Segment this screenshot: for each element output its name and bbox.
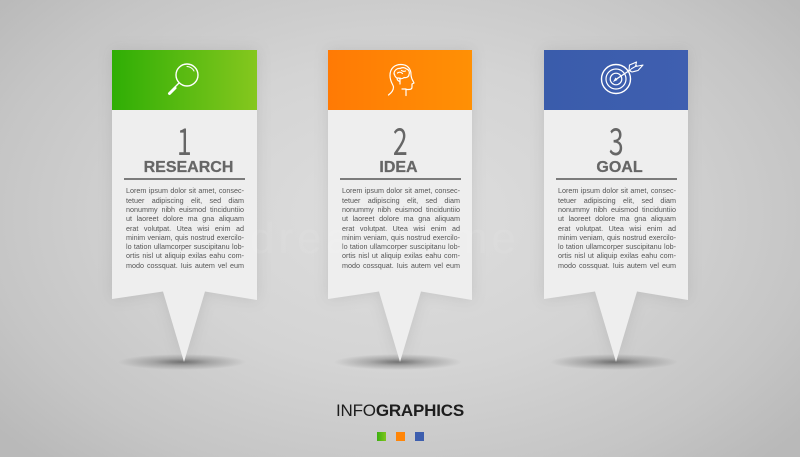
text block [342,186,460,270]
text block: Lorem ipsum dolor sit amet, consec- [342,186,460,195]
text block: tetuer adipiscing elit, sed diam [558,196,676,205]
footer title: INFOGRAPHICS [336,401,464,420]
heading: goal: GOAL [596,159,643,176]
orange square [396,432,405,441]
text block [126,186,244,270]
text block: minim veniam, quis nostrud exercilo- [558,233,676,242]
panel: research [110,48,259,362]
text block: ortis nisl ut aliquip exilas eahu com- [342,251,460,260]
icon: head with brain [388,64,415,96]
shadow: card 2 [334,354,462,370]
shadow: card 1 [118,354,246,370]
text block: erat volutpat. Utea wisi enim ad [126,224,244,233]
text block: tetuer adipiscing elit, sed diam [126,196,244,205]
text block: nonummy nibh euismod tinciduntiio [342,205,460,214]
header band: orange [328,50,472,110]
green square [377,432,386,441]
card body with pointer [110,48,259,362]
text block: nonummy nibh euismod tinciduntiio [126,205,244,214]
card body with pointer [542,48,690,362]
divider rule [556,178,677,180]
heading: research: RESEARCH [144,159,233,176]
number 3: 3 [609,112,624,166]
text block: lo tation ullamcorper suscipitanu lob- [558,242,676,251]
text block: nonummy nibh euismod tinciduntiio [558,205,676,214]
text block: ut laoreet dolore ma gna aliquam [558,214,676,223]
heading: idea: IDEA [379,159,418,176]
shadow: card 3 [550,354,678,370]
text block: modo cossquat. Iuis autem vel eum [342,261,460,270]
header band: blue [544,50,688,110]
text block: minim veniam, quis nostrud exercilo- [126,233,244,242]
text block: ut laoreet dolore ma gna aliquam [342,214,460,223]
text block: Lorem ipsum dolor sit amet, consec- [126,186,244,195]
icon: magnifying glass [168,63,199,96]
divider rule [340,178,461,180]
panel: idea [326,48,474,362]
text block: erat volutpat. Utea wisi enim ad [342,224,460,233]
text block: minim veniam, quis nostrud exercilo- [342,233,460,242]
text block: erat volutpat. Utea wisi enim ad [558,224,676,233]
watermark: dreamstime [250,214,520,263]
card body with pointer [326,48,474,362]
text block: ortis nisl ut aliquip exilas eahu com- [558,251,676,260]
text block: tetuer adipiscing elit, sed diam [342,196,460,205]
text block: modo cossquat. Iuis autem vel eum [558,261,676,270]
text block: Lorem ipsum dolor sit amet, consec- [558,186,676,195]
number 1: 1 [177,112,192,166]
legend squares [377,432,424,441]
icon: target with arrow [600,61,644,94]
text block: ut laoreet dolore ma gna aliquam [126,214,244,223]
panel: goal [542,48,690,362]
divider rule [124,178,245,180]
number 2: 2 [393,112,408,166]
text block: lo tation ullamcorper suscipitanu lob- [126,242,244,251]
blue square [415,432,424,441]
header band: green [112,50,257,110]
text block [558,186,676,270]
text block: modo cossquat. Iuis autem vel eum [126,261,244,270]
text block: ortis nisl ut aliquip exilas eahu com- [126,251,244,260]
text block: lo tation ullamcorper suscipitanu lob- [342,242,460,251]
